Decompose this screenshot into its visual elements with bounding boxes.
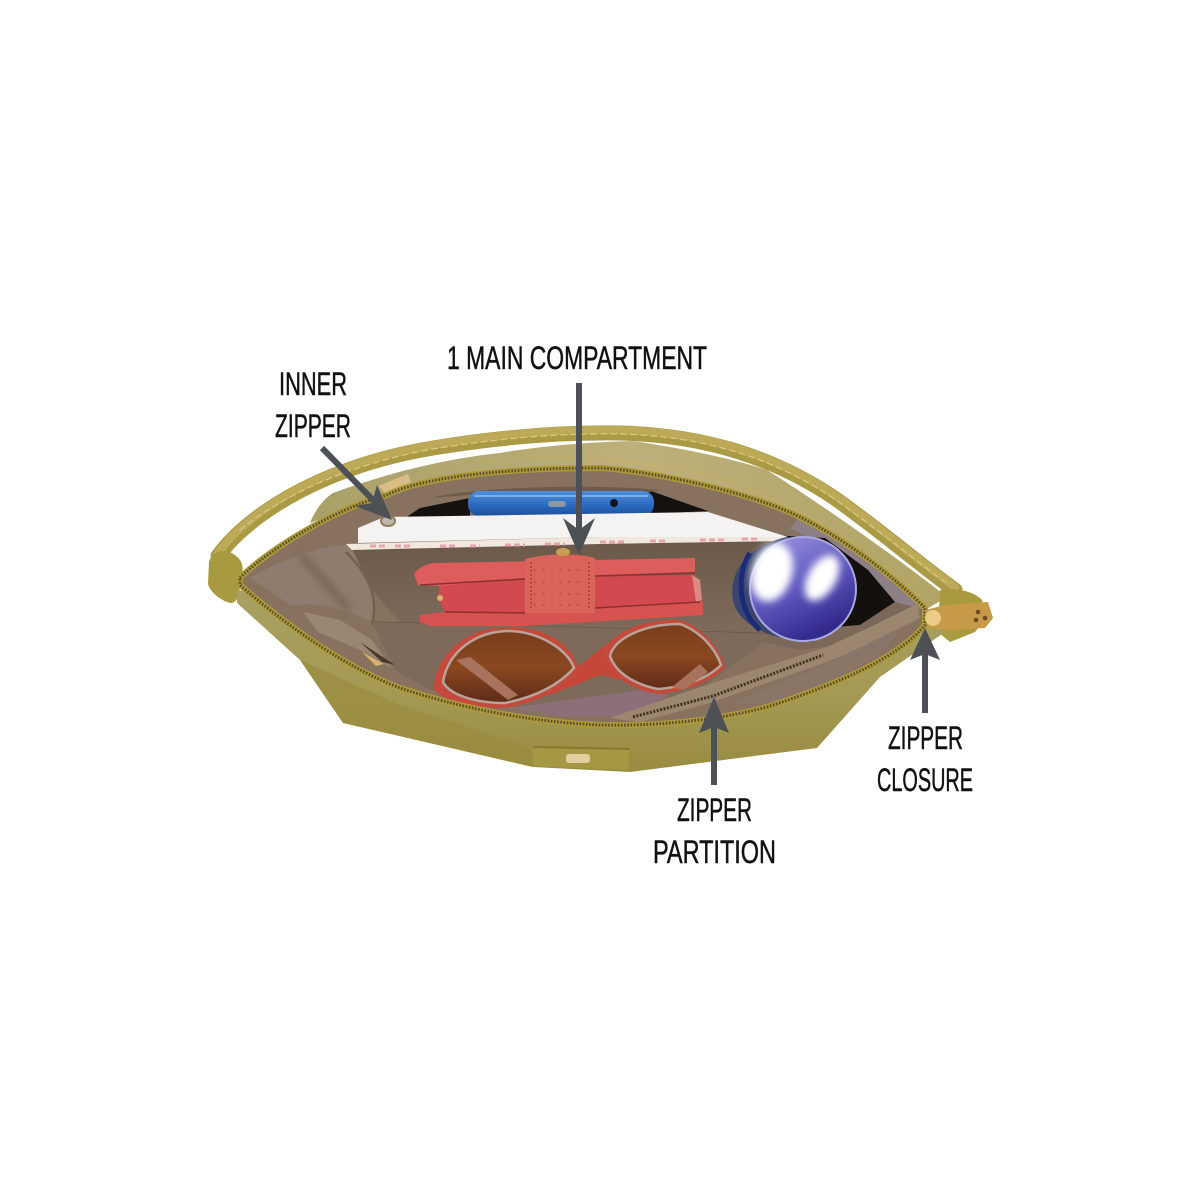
center back wall xyxy=(350,538,790,632)
zipper track xyxy=(240,468,925,725)
left inner pocket xyxy=(303,612,395,668)
dark pocket behind phone xyxy=(405,490,708,518)
gathered lining folds left xyxy=(250,545,775,634)
right lining behind flask base xyxy=(700,602,918,650)
arrow: inner zipper xyxy=(322,448,392,520)
lower lining xyxy=(372,622,775,716)
label: zipper closure: ZIPPER xyxy=(888,720,963,756)
dark corner behind flask xyxy=(770,535,895,640)
handle knot left xyxy=(208,551,243,603)
label: zipper partition: PARTITION xyxy=(653,834,776,870)
label: zipper partition xyxy=(653,792,776,870)
back panel xyxy=(310,441,947,610)
label: main compartment: 1 MAIN COMPARTMENT xyxy=(447,340,707,376)
front panel xyxy=(237,590,945,772)
interior lining xyxy=(240,468,925,725)
back panel stitching xyxy=(480,457,830,530)
notebook xyxy=(346,512,788,550)
label: zipper closure: CLOSURE xyxy=(877,762,973,798)
label: inner zipper xyxy=(275,366,351,444)
zipper pull xyxy=(925,602,993,630)
zipper pull at inner pocket xyxy=(378,474,411,526)
handle xyxy=(218,430,955,590)
front tag xyxy=(533,747,630,770)
front lower shade xyxy=(300,660,533,767)
sunglasses xyxy=(433,620,725,716)
label: zipper closure xyxy=(877,720,973,798)
label: inner zipper: ZIPPER xyxy=(275,408,351,444)
label: zipper partition: ZIPPER xyxy=(677,792,752,828)
upper lining shadow above phone xyxy=(430,487,660,498)
pale rim right xyxy=(790,517,925,612)
phone xyxy=(468,491,654,516)
arrow: main compartment xyxy=(563,383,595,555)
arrow: zipper closure xyxy=(910,628,940,713)
label: inner zipper: INNER xyxy=(279,366,347,402)
zipper partition xyxy=(610,604,920,722)
arrow: zipper partition xyxy=(699,697,729,785)
flask xyxy=(732,536,857,642)
wallet xyxy=(414,548,703,626)
handle tab right xyxy=(938,589,985,642)
